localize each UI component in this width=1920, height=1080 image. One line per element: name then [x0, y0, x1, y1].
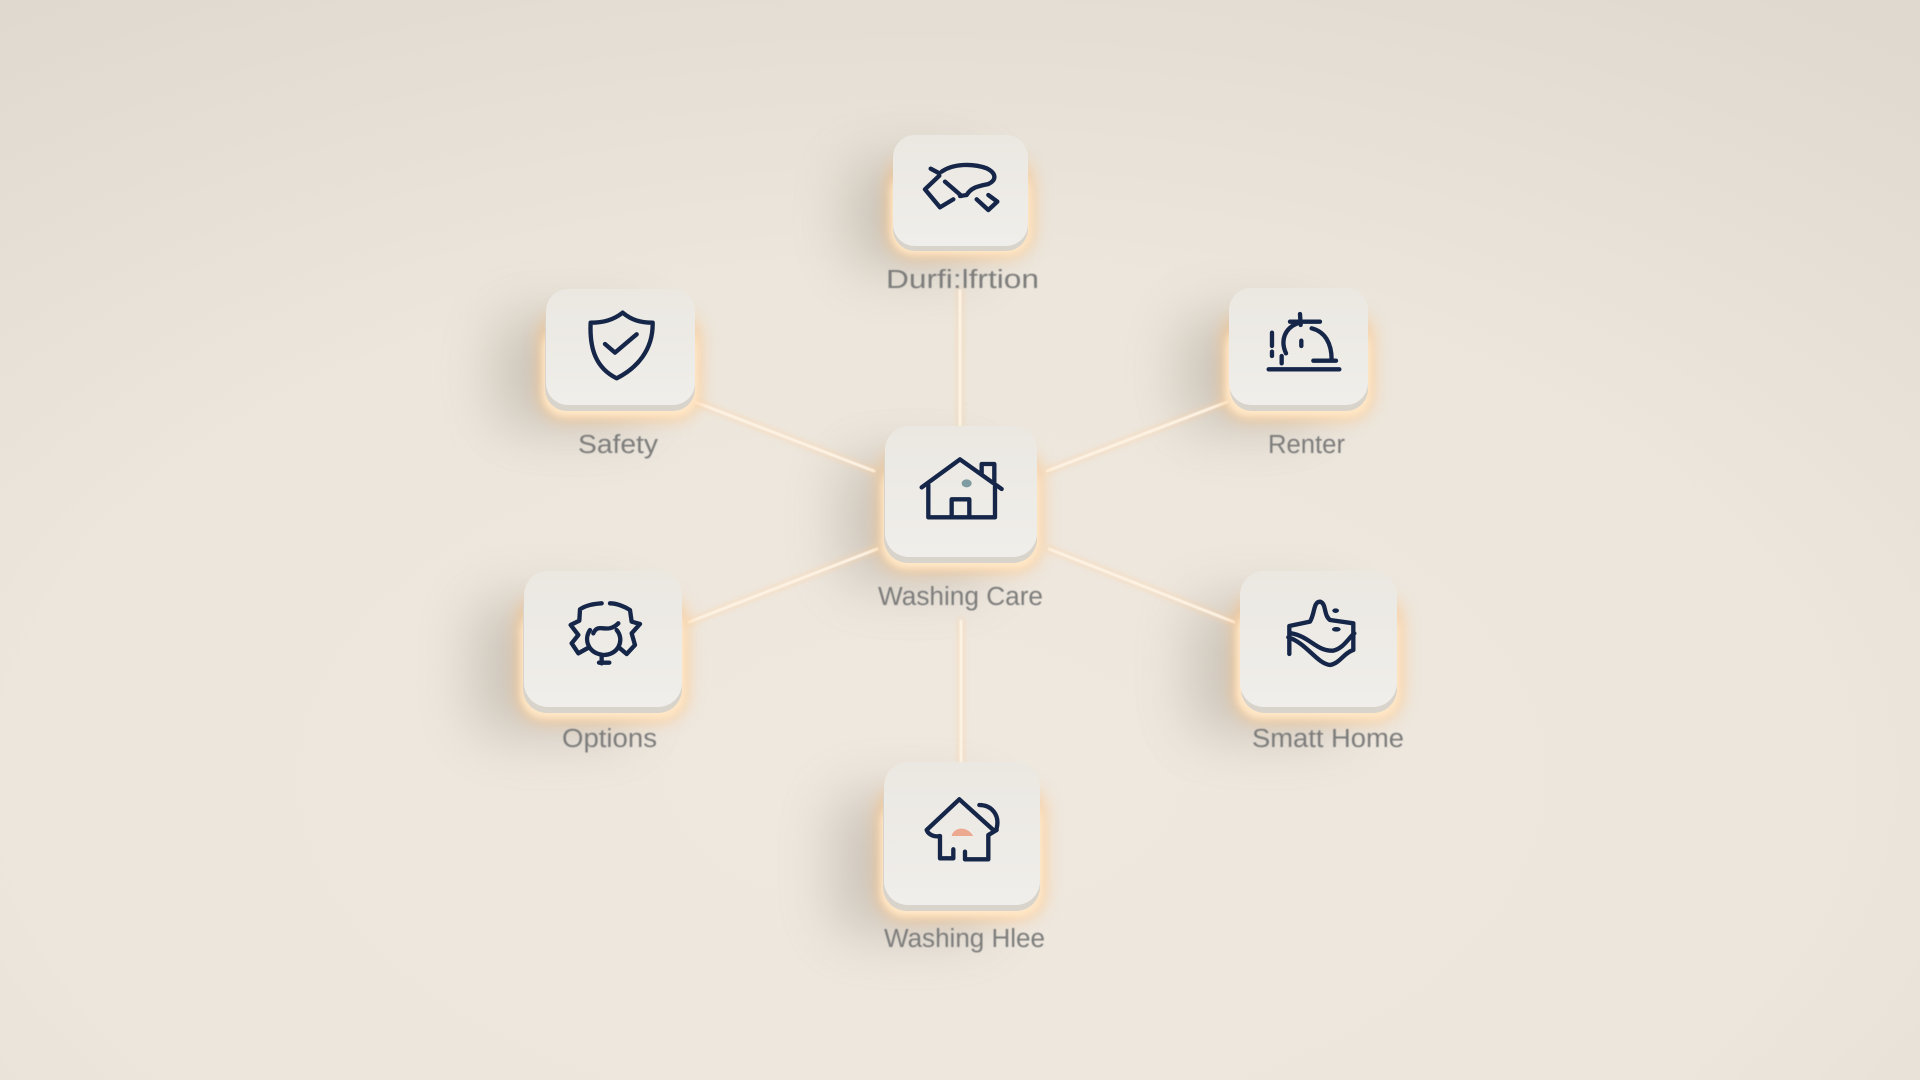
label: renter: Renter — [1268, 431, 1346, 459]
icon: wave hand — [1288, 602, 1354, 665]
card: Renter node — [1229, 288, 1368, 459]
label: durability: Durfi:lfrtion — [886, 266, 1039, 294]
card: Durability top node — [886, 135, 1039, 294]
label: smart home: Smatt Home — [1252, 725, 1404, 753]
card: Washing Hlee bottom node — [883, 762, 1045, 953]
card glows — [519, 158, 1401, 918]
card: Washing Care centre node — [878, 426, 1043, 611]
icon: house — [922, 459, 1002, 517]
icon: shield with check — [591, 313, 653, 378]
card: Smart Home node — [1240, 571, 1404, 753]
icon: durability outline — [925, 165, 997, 210]
connector lines — [689, 291, 1234, 762]
label: washing hlee: Washing Hlee — [884, 925, 1045, 953]
label: washing care: Washing Care — [878, 583, 1043, 611]
card shadows — [473, 160, 1348, 935]
label: safety: Safety — [578, 431, 658, 459]
icon: gear — [571, 603, 640, 663]
card: Options node — [523, 571, 682, 753]
label: options: Options — [562, 725, 657, 753]
icon: house with cap — [927, 799, 997, 859]
card: Safety node — [545, 289, 695, 459]
icon: service bell — [1269, 314, 1339, 369]
